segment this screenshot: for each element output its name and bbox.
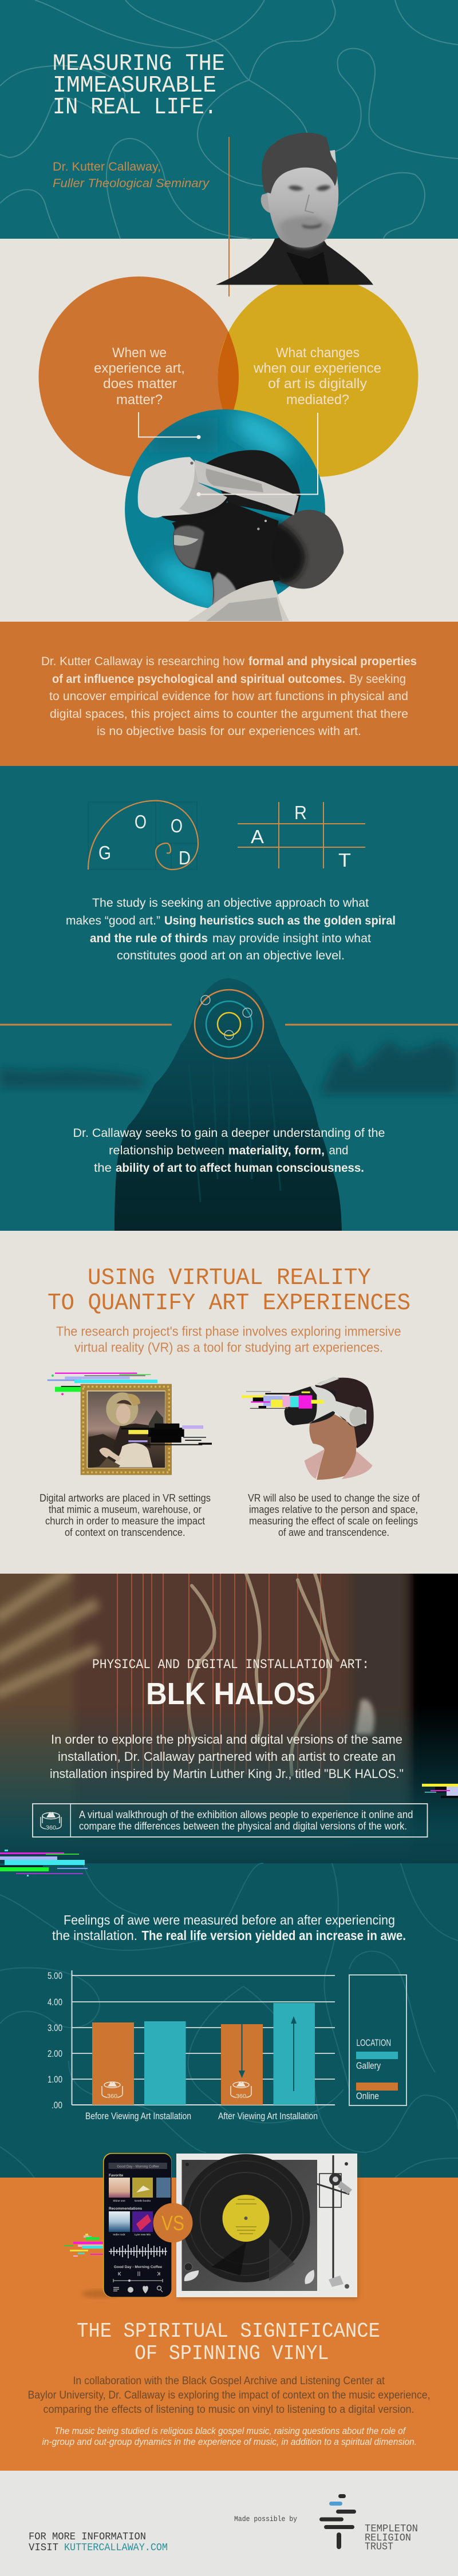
horizontal rules: [0, 1024, 458, 1026]
jacket: [216, 238, 373, 285]
author byline: [53, 160, 210, 190]
gridlines: [72, 1976, 335, 2079]
question left: matter?: [116, 392, 163, 408]
golden spiral with GOOD: O: [135, 811, 147, 832]
question right: when our experience: [253, 361, 381, 376]
hair top: [204, 450, 301, 517]
caption right: images relative to the person and space,: [249, 1504, 418, 1515]
installation photo: [0, 1574, 458, 1863]
consciousness text: the: [94, 1161, 112, 1175]
glitch: right of installation: [422, 1784, 458, 1798]
summary text: to uncover empirical evidence for how art functions in physical and: [49, 690, 408, 703]
divider line: [228, 137, 230, 297]
smartphone music app: Recommendations: [109, 2207, 143, 2211]
section intro: The research project's first phase involves exploring immersive: [56, 1323, 401, 1338]
panel: header: [0, 0, 458, 239]
visor shadow: [161, 496, 229, 522]
italic note: in-group and out-group dynamics in the experience of music, in addition to a spiritual dimension.: [42, 2437, 417, 2447]
axis labels: 4.00: [48, 1997, 62, 2008]
author byline: Dr. Kutter Callaway,: [53, 160, 161, 173]
summary text: is no objective basis for our experiences with art.: [97, 725, 361, 738]
photo: woman by a lake: [0, 978, 458, 1231]
question left: experience art,: [94, 361, 185, 376]
results text: [52, 1913, 406, 1943]
chart legend: Gallery: [356, 2060, 381, 2071]
golden spiral with GOOD: O: [171, 815, 183, 836]
results text: Feelings of awe were measured before an after experiencing: [64, 1913, 395, 1927]
consciousness text: ability of art to affect human consciousness.: [116, 1161, 364, 1175]
installation description: installation, Dr. Callaway partnered with an artist to create an: [58, 1749, 396, 1764]
summary text: Dr. Kutter Callaway is researching how: [41, 655, 245, 668]
face: [267, 150, 338, 248]
installation description: In order to explore the physical and digital versions of the same: [51, 1732, 402, 1747]
consciousness text: and: [329, 1144, 348, 1157]
neck and face: [172, 502, 281, 607]
x axis labels: After Viewing Art Installation: [218, 2111, 318, 2121]
smartphone music app: Shine one: [113, 2199, 125, 2202]
waveform: [109, 2244, 167, 2259]
ear: [261, 192, 271, 213]
caption right: VR will also be used to change the size of: [248, 1492, 420, 1504]
woman wearing vr headset: [138, 450, 344, 621]
description: Baylor University, Dr. Callaway is exploring the impact of context on the music experience,: [27, 2389, 431, 2401]
glitch: eye bar: [242, 1391, 324, 1409]
consciousness text: Dr. Callaway seeks to gain a deeper understanding of the: [73, 1127, 385, 1140]
section heading: USING VIRTUAL REALITY: [88, 1265, 371, 1291]
heuristics text: The study is seeking an objective approach to what: [92, 896, 369, 910]
connector lines: [139, 412, 318, 495]
more information: VISIT: [29, 2542, 58, 2554]
smartphone music app: Indie rock: [113, 2233, 125, 2236]
heuristics text: and the rule of thirds: [90, 932, 208, 945]
templeton logo: TRUST: [365, 2542, 393, 2553]
vinyl disc: [125, 404, 325, 618]
vs badge: [153, 2203, 192, 2243]
more information: [29, 2531, 168, 2554]
caption left: that mimic a museum, warehouse, or: [49, 1504, 202, 1515]
rule of thirds with ART: R: [294, 802, 307, 823]
orange question circle: [39, 276, 239, 477]
axis labels: .00: [52, 2100, 62, 2111]
chart legend: [349, 1975, 406, 2105]
heuristics text: may provide insight into what: [212, 932, 371, 945]
chart legend: LOCATION: [356, 2037, 391, 2048]
caption left: church in order to measure the impact: [45, 1515, 205, 1527]
golden spiral with GOOD: D: [179, 847, 191, 868]
bars: before viewing: [92, 2021, 185, 2105]
smartphone music app: [103, 2153, 172, 2297]
question right: [253, 345, 381, 408]
caption right: measuring the effect of scale on feelings: [249, 1515, 418, 1527]
panel: BLK HALOS installation: [0, 1574, 458, 1863]
arrow: decrease: [239, 2024, 245, 2078]
axis labels: 1.00: [48, 2074, 62, 2085]
x axis labels: [85, 2111, 318, 2121]
caption right: of awe and transcendence.: [278, 1527, 389, 1538]
icon: 360 on first bar: [102, 2081, 123, 2100]
description: comparing the effects of listening to music on vinyl to listening to a digital version.: [44, 2404, 414, 2416]
panel: research summary: [0, 622, 458, 766]
glitch: beside phone: [64, 2234, 103, 2257]
question right: mediated?: [286, 392, 349, 408]
framed painting with glitch: [48, 1373, 212, 1475]
hair: [262, 133, 337, 193]
summary text: formal and physical properties: [248, 655, 417, 668]
title: [53, 51, 225, 121]
section heading: [48, 1265, 410, 1317]
turntable: [176, 2154, 358, 2299]
chart legend: Online: [356, 2091, 379, 2101]
heuristics text: Using heuristics such as the golden spiral: [164, 914, 396, 927]
more information: FOR MORE INFORMATION: [29, 2531, 146, 2543]
icon: 360 on third bar: [231, 2081, 251, 2100]
caption left: [40, 1492, 211, 1538]
bars: after viewing: [221, 2003, 315, 2105]
italic note: [42, 2426, 417, 2447]
arrow: increase: [291, 2016, 297, 2091]
phone shadow: [81, 2290, 120, 2298]
installation description: [50, 1732, 404, 1781]
portrait of Dr. Callaway: [216, 133, 373, 297]
panel: venn questions: [39, 276, 418, 621]
templeton logo: TEMPLETON: [365, 2523, 418, 2535]
summary text: By seeking: [349, 673, 406, 686]
x axis labels: Before Viewing Art Installation: [85, 2111, 191, 2121]
question left: When we: [112, 345, 167, 361]
glitch: left of results: [0, 1850, 88, 1876]
panel: footer: [0, 2471, 458, 2576]
summary text: digital spaces, this project aims to counter the argument that there: [50, 708, 408, 721]
vr headset portrait with glitch: [242, 1377, 374, 1480]
section heading: TO QUANTIFY ART EXPERIENCES: [48, 1290, 410, 1317]
heuristics text: makes “good art.”: [66, 914, 160, 927]
headset body: [138, 457, 227, 517]
italic note: The music being studied is religious black gospel music, raising questions about the role of: [54, 2426, 406, 2436]
rule of thirds with ART: [238, 802, 365, 871]
caption right: [248, 1492, 420, 1538]
question right: What changes: [276, 345, 360, 361]
axis labels: 5.00: [48, 1970, 62, 1981]
axis labels: [48, 1970, 62, 2111]
bun: [263, 510, 344, 588]
caption left: Digital artworks are placed in VR settings: [40, 1492, 211, 1504]
question left: does matter: [103, 376, 177, 392]
installation title: BLK HALOS: [146, 1677, 315, 1711]
glitch: lower right: [121, 1424, 212, 1445]
consciousness text: relationship between: [109, 1144, 224, 1157]
section eyebrow: PHYSICAL AND DIGITAL INSTALLATION ART:: [92, 1657, 369, 1672]
panel: heuristics and consciousness: [0, 766, 458, 1231]
heuristics text: [66, 896, 396, 962]
section heading: OF SPINNING VINYL: [135, 2342, 329, 2365]
icon: 360 on third bar: 360: [236, 2093, 246, 2100]
icon: 360 on first bar: 360: [107, 2093, 117, 2100]
section intro: [56, 1323, 401, 1354]
description: In collaboration with the Black Gospel Archive and Listening Center at: [73, 2375, 385, 2387]
smartphone music app: Good Day - Morning Coffee: [117, 2165, 159, 2168]
concentric circles icon: [195, 990, 263, 1058]
axis labels: 2.00: [48, 2048, 62, 2059]
smartphone music app: Favorite: [109, 2174, 124, 2178]
rule of thirds with ART: T: [338, 850, 351, 871]
caption left: of context on transcendence.: [65, 1527, 185, 1538]
smartphone music app: Lyze new Mix: [135, 2233, 151, 2236]
templeton logo: [319, 2494, 418, 2553]
title: IN REAL LIFE.: [53, 94, 217, 121]
section intro: virtual reality (VR) as a tool for studying art experiences.: [74, 1340, 383, 1354]
question left: [94, 345, 185, 408]
section heading: [77, 2320, 380, 2365]
consciousness text: [73, 1127, 385, 1175]
bar chart: [48, 1970, 335, 2121]
more information: KUTTERCALLAWAY.COM: [64, 2542, 168, 2554]
virtual walkthrough callout: A virtual walkthrough of the exhibition allows people to experience it online and: [79, 1808, 413, 1820]
smartphone music app: Gentle books: [135, 2199, 151, 2202]
panel: virtual reality section: [40, 1265, 420, 1538]
golden spiral with GOOD: G: [98, 842, 111, 863]
smartphone music app: Good Day - Morning Coffee: [114, 2265, 162, 2269]
axis labels: 3.00: [48, 2022, 62, 2033]
golden spiral with GOOD: [88, 801, 198, 870]
description: [27, 2375, 431, 2416]
strap: [195, 460, 299, 515]
collar: [188, 580, 289, 621]
heuristics text: constitutes good art on an objective level.: [117, 949, 345, 962]
rule of thirds with ART: A: [251, 826, 264, 847]
panel: spinning vinyl: [0, 2153, 458, 2471]
virtual walkthrough callout: [33, 1804, 427, 1837]
title: IMMEASURABLE: [53, 73, 216, 99]
glitch: top left: [48, 1373, 157, 1395]
panel: awe results: [0, 1863, 458, 2178]
installation description: installation inspired by Martin Luther King Jr., titled "BLK HALOS.": [50, 1767, 404, 1781]
templeton logo: RELIGION: [365, 2532, 411, 2544]
virtual walkthrough callout: compare the differences between the physical and digital versions of the work.: [79, 1820, 407, 1832]
yellow question circle: [218, 276, 418, 477]
made possible by: Made possible by: [234, 2515, 297, 2523]
icon: 360 degree view: 360: [46, 1825, 56, 1831]
results text: the installation.: [52, 1928, 137, 1943]
section heading: THE SPIRITUAL SIGNIFICANCE: [77, 2320, 380, 2343]
vs badge: VS: [161, 2211, 184, 2235]
consciousness text: materiality, form,: [228, 1144, 325, 1157]
summary text: [41, 655, 417, 738]
question right: of art is digitally: [268, 376, 367, 392]
title: MEASURING THE: [53, 51, 225, 77]
author byline: Fuller Theological Seminary: [53, 177, 210, 190]
icon: 360 degree view: [41, 1812, 61, 1831]
summary text: of art influence psychological and spiritual outcomes.: [52, 673, 345, 686]
results text: The real life version yielded an increase in awe.: [142, 1928, 406, 1943]
